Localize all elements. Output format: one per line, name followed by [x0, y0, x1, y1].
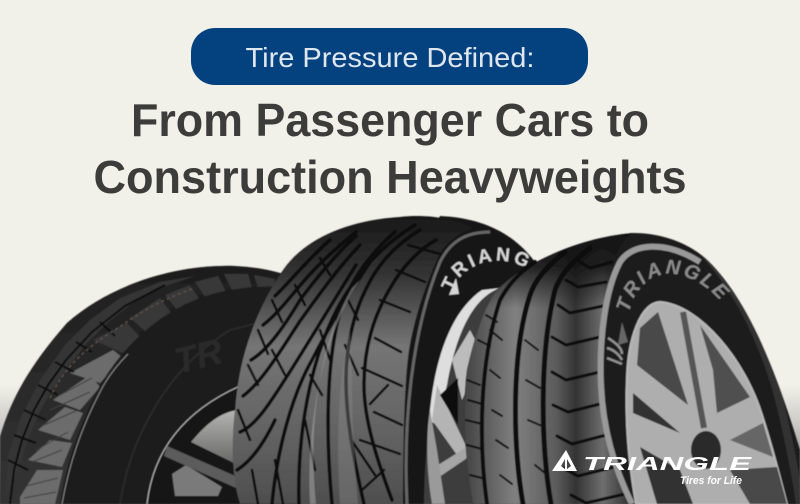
wheel hub	[691, 431, 721, 469]
pill text: Tire Pressure Defined:	[246, 42, 534, 73]
title pill	[191, 28, 588, 85]
tire body	[0, 266, 300, 504]
wheel	[147, 386, 250, 504]
tread highlight	[309, 280, 360, 504]
heading: From Passenger Cars to	[131, 94, 649, 146]
tread blocks	[0, 266, 282, 504]
tread face	[233, 216, 472, 504]
logo triangle icon	[552, 450, 577, 471]
heading	[94, 94, 686, 203]
sidewall	[60, 287, 300, 504]
sidewall	[395, 216, 535, 504]
wheel	[626, 302, 787, 504]
lettering triangle	[449, 278, 459, 295]
middle tire	[232, 215, 534, 504]
tread face	[465, 233, 633, 504]
logo tagline: Tires for Life	[680, 475, 742, 487]
tread grooves	[237, 225, 440, 504]
left tire	[0, 266, 300, 504]
tread grooves	[466, 248, 625, 504]
sidewall ridge	[601, 240, 800, 504]
floor gradient	[0, 385, 800, 504]
logo wordmark: TRIANGLE	[583, 454, 753, 474]
heading: Construction Heavyweights	[94, 151, 686, 203]
tire body	[465, 233, 800, 504]
logo: Triangle	[552, 450, 753, 487]
sidewall marks	[607, 322, 628, 364]
sidewall lettering: TRIANGLE	[616, 259, 731, 310]
sidewall lettering: TR	[170, 330, 227, 382]
wheel gaps	[633, 312, 787, 504]
wheel	[424, 288, 500, 504]
right tire	[464, 232, 800, 504]
